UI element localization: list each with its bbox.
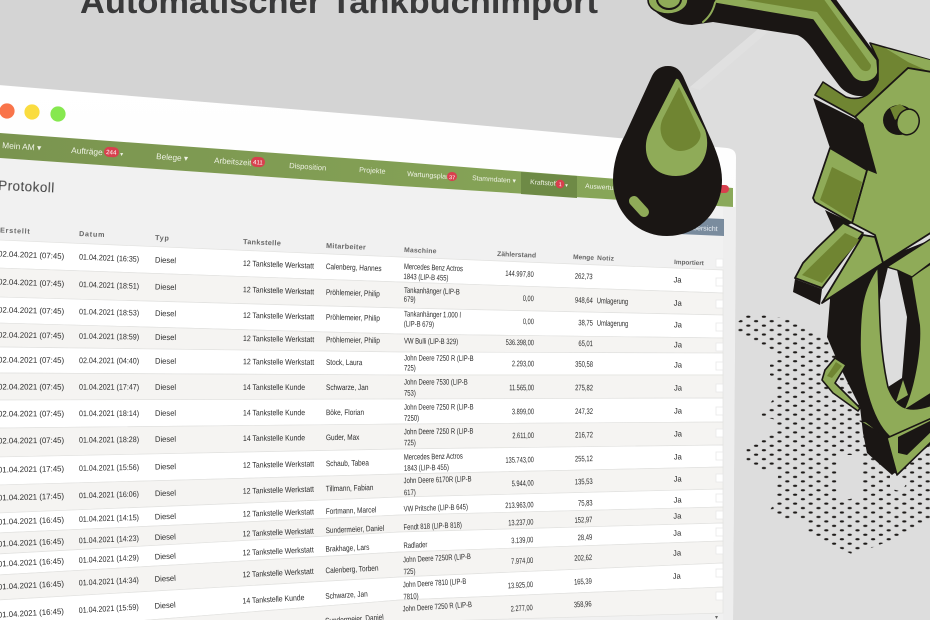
- row 11: Fortmann, Marcel: [326, 505, 377, 516]
- nozzle pipe: [648, 0, 880, 96]
- icon: fuel nozzle: [648, 0, 930, 475]
- row 10: 5.944,00: [512, 480, 534, 489]
- row 2: Tankanhänger (LIP-B: [404, 287, 460, 297]
- row 9: 12 Tankstelle Werkstatt: [243, 459, 315, 470]
- row 9: Mercedes Benz Actros: [404, 453, 463, 462]
- window frame: [0, 85, 736, 620]
- panel: software window: [0, 85, 736, 620]
- row 11: [0, 495, 682, 527]
- row 7: Diesel: [155, 409, 176, 418]
- row 8: 01.04.2021 (18:28): [79, 435, 140, 445]
- row 7: Böke, Florian: [326, 407, 364, 417]
- row 2: Ja: [674, 298, 683, 308]
- row 13: 12 Tankstelle Werkstatt: [242, 545, 315, 558]
- row 13: 28,49: [578, 534, 593, 543]
- row 15: 14 Tankstelle Kunde: [242, 593, 305, 606]
- row 13: Brakhage, Lars: [325, 542, 370, 554]
- row 7: 3.899,00: [512, 408, 534, 417]
- row 13: 3.139,00: [511, 537, 534, 546]
- row 8: 14 Tankstelle Kunde: [243, 433, 305, 443]
- row 1: Diesel: [155, 255, 177, 265]
- row 10: Tillmann, Fabian: [326, 482, 373, 494]
- row 2: [0, 274, 683, 313]
- row 12: Diesel: [155, 532, 176, 542]
- navigation bar: Auswertung: [585, 183, 621, 193]
- row 12: 12 Tankstelle Werkstatt: [242, 526, 315, 539]
- row 15: 7810): [403, 593, 419, 602]
- row 14: [0, 543, 682, 597]
- row 10: [0, 470, 683, 509]
- row 1: Calenberg, Hannes: [326, 261, 382, 273]
- row 4: Pröhlemeier, Philip: [326, 335, 380, 345]
- bolt: [883, 104, 922, 138]
- row 14: 12 Tankstelle Werkstatt: [242, 566, 315, 580]
- row 1: 144.997,80: [505, 270, 534, 279]
- row 3: 0,00: [523, 318, 534, 327]
- row 3: Umlagerung: [597, 320, 628, 329]
- row 2: 01.04.2021 (18:51): [79, 280, 140, 291]
- row 6: 11.565,00: [509, 384, 534, 393]
- row 6: Ja: [674, 383, 683, 393]
- main body: [852, 68, 930, 263]
- row 10: 617): [404, 489, 416, 497]
- table header: Menge: [573, 254, 594, 262]
- row 2: Diesel: [155, 282, 177, 292]
- trigger lever: [793, 223, 883, 305]
- icon: oil drop: [613, 66, 722, 236]
- row 5: Diesel: [155, 356, 176, 366]
- button: Übersicht: [688, 224, 718, 233]
- row 14: John Deere 7250R (LIP-B: [403, 553, 471, 565]
- row 16: [325, 594, 592, 620]
- navigation bar: Disposition: [289, 161, 327, 173]
- row 15: 13.925,00: [508, 581, 533, 591]
- row 6: 275,82: [575, 385, 593, 393]
- row 9: 01.04.2021 (15:56): [79, 462, 140, 473]
- row 10: 01.04.2021 (16:06): [79, 489, 140, 500]
- row 15: Schwarze, Jan: [325, 589, 368, 601]
- navigation bar: Belege ▾: [156, 152, 188, 163]
- navigation bar: [0, 133, 733, 207]
- row 13: [0, 528, 682, 569]
- row 9: [0, 449, 683, 481]
- row 4: Diesel: [155, 333, 176, 342]
- row 6: Diesel: [155, 383, 176, 392]
- row 7: 01.04.2021 (18:14): [79, 408, 140, 418]
- row 15: 165,39: [574, 578, 592, 587]
- row 15: Diesel: [154, 600, 176, 611]
- row 4: Ja: [674, 340, 683, 350]
- row 4: [0, 330, 683, 350]
- row 10: Ja: [674, 474, 682, 484]
- row 5: [0, 352, 683, 375]
- row 7: 14 Tankstelle Kunde: [243, 408, 305, 418]
- row 3: 12 Tankstelle Werkstatt: [243, 310, 315, 322]
- row 1: Ja: [673, 275, 682, 285]
- row 9: 135.743,00: [505, 456, 534, 465]
- navigation bar: ▾: [120, 152, 123, 158]
- row 6: [0, 378, 683, 398]
- navigation bar: Aufträge: [71, 145, 103, 157]
- row 16: 2.277,00: [510, 604, 533, 614]
- collar: [815, 43, 930, 117]
- table header: [0, 226, 705, 267]
- row 2: 948,64: [575, 297, 593, 305]
- row 11: 75,83: [578, 500, 593, 508]
- row 1: 12 Tankstelle Werkstatt: [243, 258, 315, 271]
- row 8: 216,72: [575, 432, 593, 440]
- row 3: [0, 302, 683, 335]
- row 11: 213.963,00: [505, 501, 534, 510]
- row 6: 14 Tankstelle Kunde: [243, 382, 305, 392]
- row 2: 679): [404, 296, 416, 304]
- navigation bar: Mein AM ▾: [2, 140, 42, 153]
- row 2: 0,00: [523, 295, 534, 304]
- row 14: 7.974,00: [511, 557, 534, 566]
- row 13: Diesel: [155, 551, 176, 562]
- row 1: 262,73: [575, 273, 593, 282]
- row 5: Stock, Laura: [326, 357, 363, 367]
- row 12: 13.237,00: [508, 519, 534, 528]
- row 16: 358,96: [574, 601, 592, 610]
- row 1: 01.04.2021 (16:35): [79, 252, 140, 264]
- guard block: [813, 148, 867, 223]
- row 13: 01.04.2021 (14:29): [79, 553, 139, 565]
- row 7: 247,32: [575, 408, 593, 416]
- table rows text: [0, 248, 683, 620]
- row 14: 202,62: [574, 554, 592, 563]
- row 14: 725): [403, 568, 416, 577]
- guard clip: [822, 358, 860, 411]
- table header: Erstellt: [0, 226, 31, 236]
- row 13: Ja: [673, 528, 682, 538]
- row 11: Ja: [673, 495, 682, 505]
- row 4: VW Bulli (LIP-B 329): [404, 338, 458, 346]
- navigation bar: Arbeitszeit: [214, 156, 253, 168]
- row checkboxes: [716, 259, 723, 600]
- row 12: Ja: [673, 511, 682, 521]
- row 3: 38,75: [578, 320, 593, 328]
- row 8: [0, 426, 683, 452]
- row 9: Schaub, Tabea: [326, 458, 370, 468]
- row 9: 1843 (LIP-B 455): [404, 464, 449, 473]
- row 3: Ja: [674, 320, 683, 330]
- row 10: John Deere 6170R (LIP-B: [404, 476, 472, 485]
- row 3: Diesel: [155, 309, 176, 318]
- row 12: [0, 511, 682, 549]
- row 11: VW Pritsche (LIP-B 645): [404, 504, 468, 514]
- row 4: 01.04.2021 (18:59): [79, 331, 140, 342]
- row 1: [0, 248, 682, 292]
- table header: Notiz: [597, 255, 615, 263]
- row 12: Fendt 818 (LIP-B 818): [403, 522, 462, 532]
- row 10: Diesel: [155, 488, 176, 498]
- row 9: 255,12: [575, 455, 593, 464]
- row 5: Ja: [674, 360, 683, 370]
- row 1: Mercedes Benz Actros: [404, 263, 463, 274]
- row 14: Calenberg, Torben: [325, 563, 379, 575]
- button: [678, 217, 724, 236]
- row 7: [0, 403, 683, 425]
- nozzle base: [860, 418, 930, 475]
- row 15: [0, 566, 682, 620]
- table header: Zählerstand: [497, 251, 536, 260]
- row 12: 152,97: [574, 516, 593, 525]
- row 12: 01.04.2021 (14:23): [79, 533, 140, 545]
- row 2: Umlagerung: [597, 298, 628, 307]
- row 8: John Deere 7250 R (LIP-B: [404, 428, 474, 437]
- window controls: [0, 103, 66, 122]
- navigation bar: Projekte: [359, 165, 386, 176]
- table rows background: [0, 240, 723, 620]
- row 3: Pröhlemeier, Philip: [326, 312, 380, 323]
- row 3: Tankanhänger 1.000 l: [404, 311, 461, 320]
- navigation bar: ▾: [565, 183, 568, 189]
- row 1: 1843 (LIP-B 455): [403, 273, 449, 283]
- navigation bar: 411: [253, 160, 263, 167]
- black wedge: [813, 98, 877, 174]
- row 11: Diesel: [155, 512, 176, 522]
- row 10: 12 Tankstelle Werkstatt: [243, 484, 315, 496]
- row 2: 12 Tankstelle Werkstatt: [243, 285, 315, 297]
- row 7: 7250): [404, 415, 419, 423]
- table header: Datum: [79, 229, 105, 239]
- row 5: 725): [404, 365, 416, 373]
- navigation bar: 37: [449, 175, 455, 181]
- row 7: John Deere 7250 R (LIP-B: [404, 404, 474, 412]
- row 5: 2.293,00: [512, 360, 534, 369]
- row 11: 01.04.2021 (14:15): [79, 513, 140, 524]
- halftone dot shadow: [738, 316, 930, 554]
- table header: Tankstelle: [243, 237, 281, 248]
- row 8: 725): [404, 440, 416, 448]
- row 14: 01.04.2021 (14:34): [79, 575, 139, 588]
- row 10: 135,53: [575, 478, 593, 487]
- table header: Typ: [155, 233, 170, 243]
- row 9: Ja: [674, 452, 683, 462]
- navigation bar: Wartungsplan: [407, 171, 450, 181]
- navigation bar: Kraftstoff: [530, 179, 557, 188]
- navigation bar: 1: [558, 182, 562, 188]
- row 15: John Deere 7810 (LIP-B: [403, 578, 467, 590]
- row 4: 65,01: [578, 340, 593, 348]
- row 11: 12 Tankstelle Werkstatt: [243, 507, 315, 519]
- row 9: Diesel: [155, 462, 176, 472]
- row 7: Ja: [674, 406, 683, 416]
- row 6: 753): [404, 390, 416, 398]
- row 5: 350,58: [575, 361, 593, 369]
- row 6: Schwarze, Jan: [326, 382, 368, 392]
- guard ring: [860, 238, 930, 437]
- row 14: Ja: [673, 548, 682, 558]
- black ring backing: [827, 240, 930, 475]
- row 6: John Deere 7530 (LIP-B: [404, 379, 468, 387]
- row 13: Radlader: [403, 541, 428, 550]
- row 8: 2.611,00: [512, 432, 534, 441]
- row 15: Ja: [672, 571, 682, 581]
- row 2: Pröhlemeier, Philip: [326, 287, 380, 299]
- row 4: 536.398,00: [506, 339, 534, 348]
- row 12: Sundermeier, Daniel: [325, 523, 385, 535]
- row 5: 12 Tankstelle Werkstatt: [243, 357, 315, 367]
- row 16: John Deere 7250 R (LIP-B: [402, 601, 473, 614]
- row 15: 01.04.2021 (15:59): [78, 602, 139, 615]
- row 14: Diesel: [154, 574, 176, 584]
- row 6: 01.04.2021 (17:47): [79, 382, 140, 392]
- table header: Mitarbeiter: [326, 241, 366, 252]
- row 8: Ja: [674, 429, 683, 439]
- navigation bar: Stammdaten ▾: [472, 175, 517, 185]
- row 8: Diesel: [155, 435, 176, 444]
- row 5: 02.04.2021 (04:40): [79, 356, 140, 366]
- row 3: 01.04.2021 (18:53): [79, 307, 140, 318]
- table header: Maschine: [404, 247, 437, 255]
- row 3: (LIP-B 679): [404, 321, 434, 329]
- row 5: John Deere 7250 R (LIP-B: [404, 355, 474, 363]
- row 8: Guder, Max: [326, 432, 360, 442]
- navigation bar: 244: [106, 149, 117, 157]
- row 4: 12 Tankstelle Werkstatt: [243, 334, 315, 344]
- table header: Importiert: [674, 259, 705, 267]
